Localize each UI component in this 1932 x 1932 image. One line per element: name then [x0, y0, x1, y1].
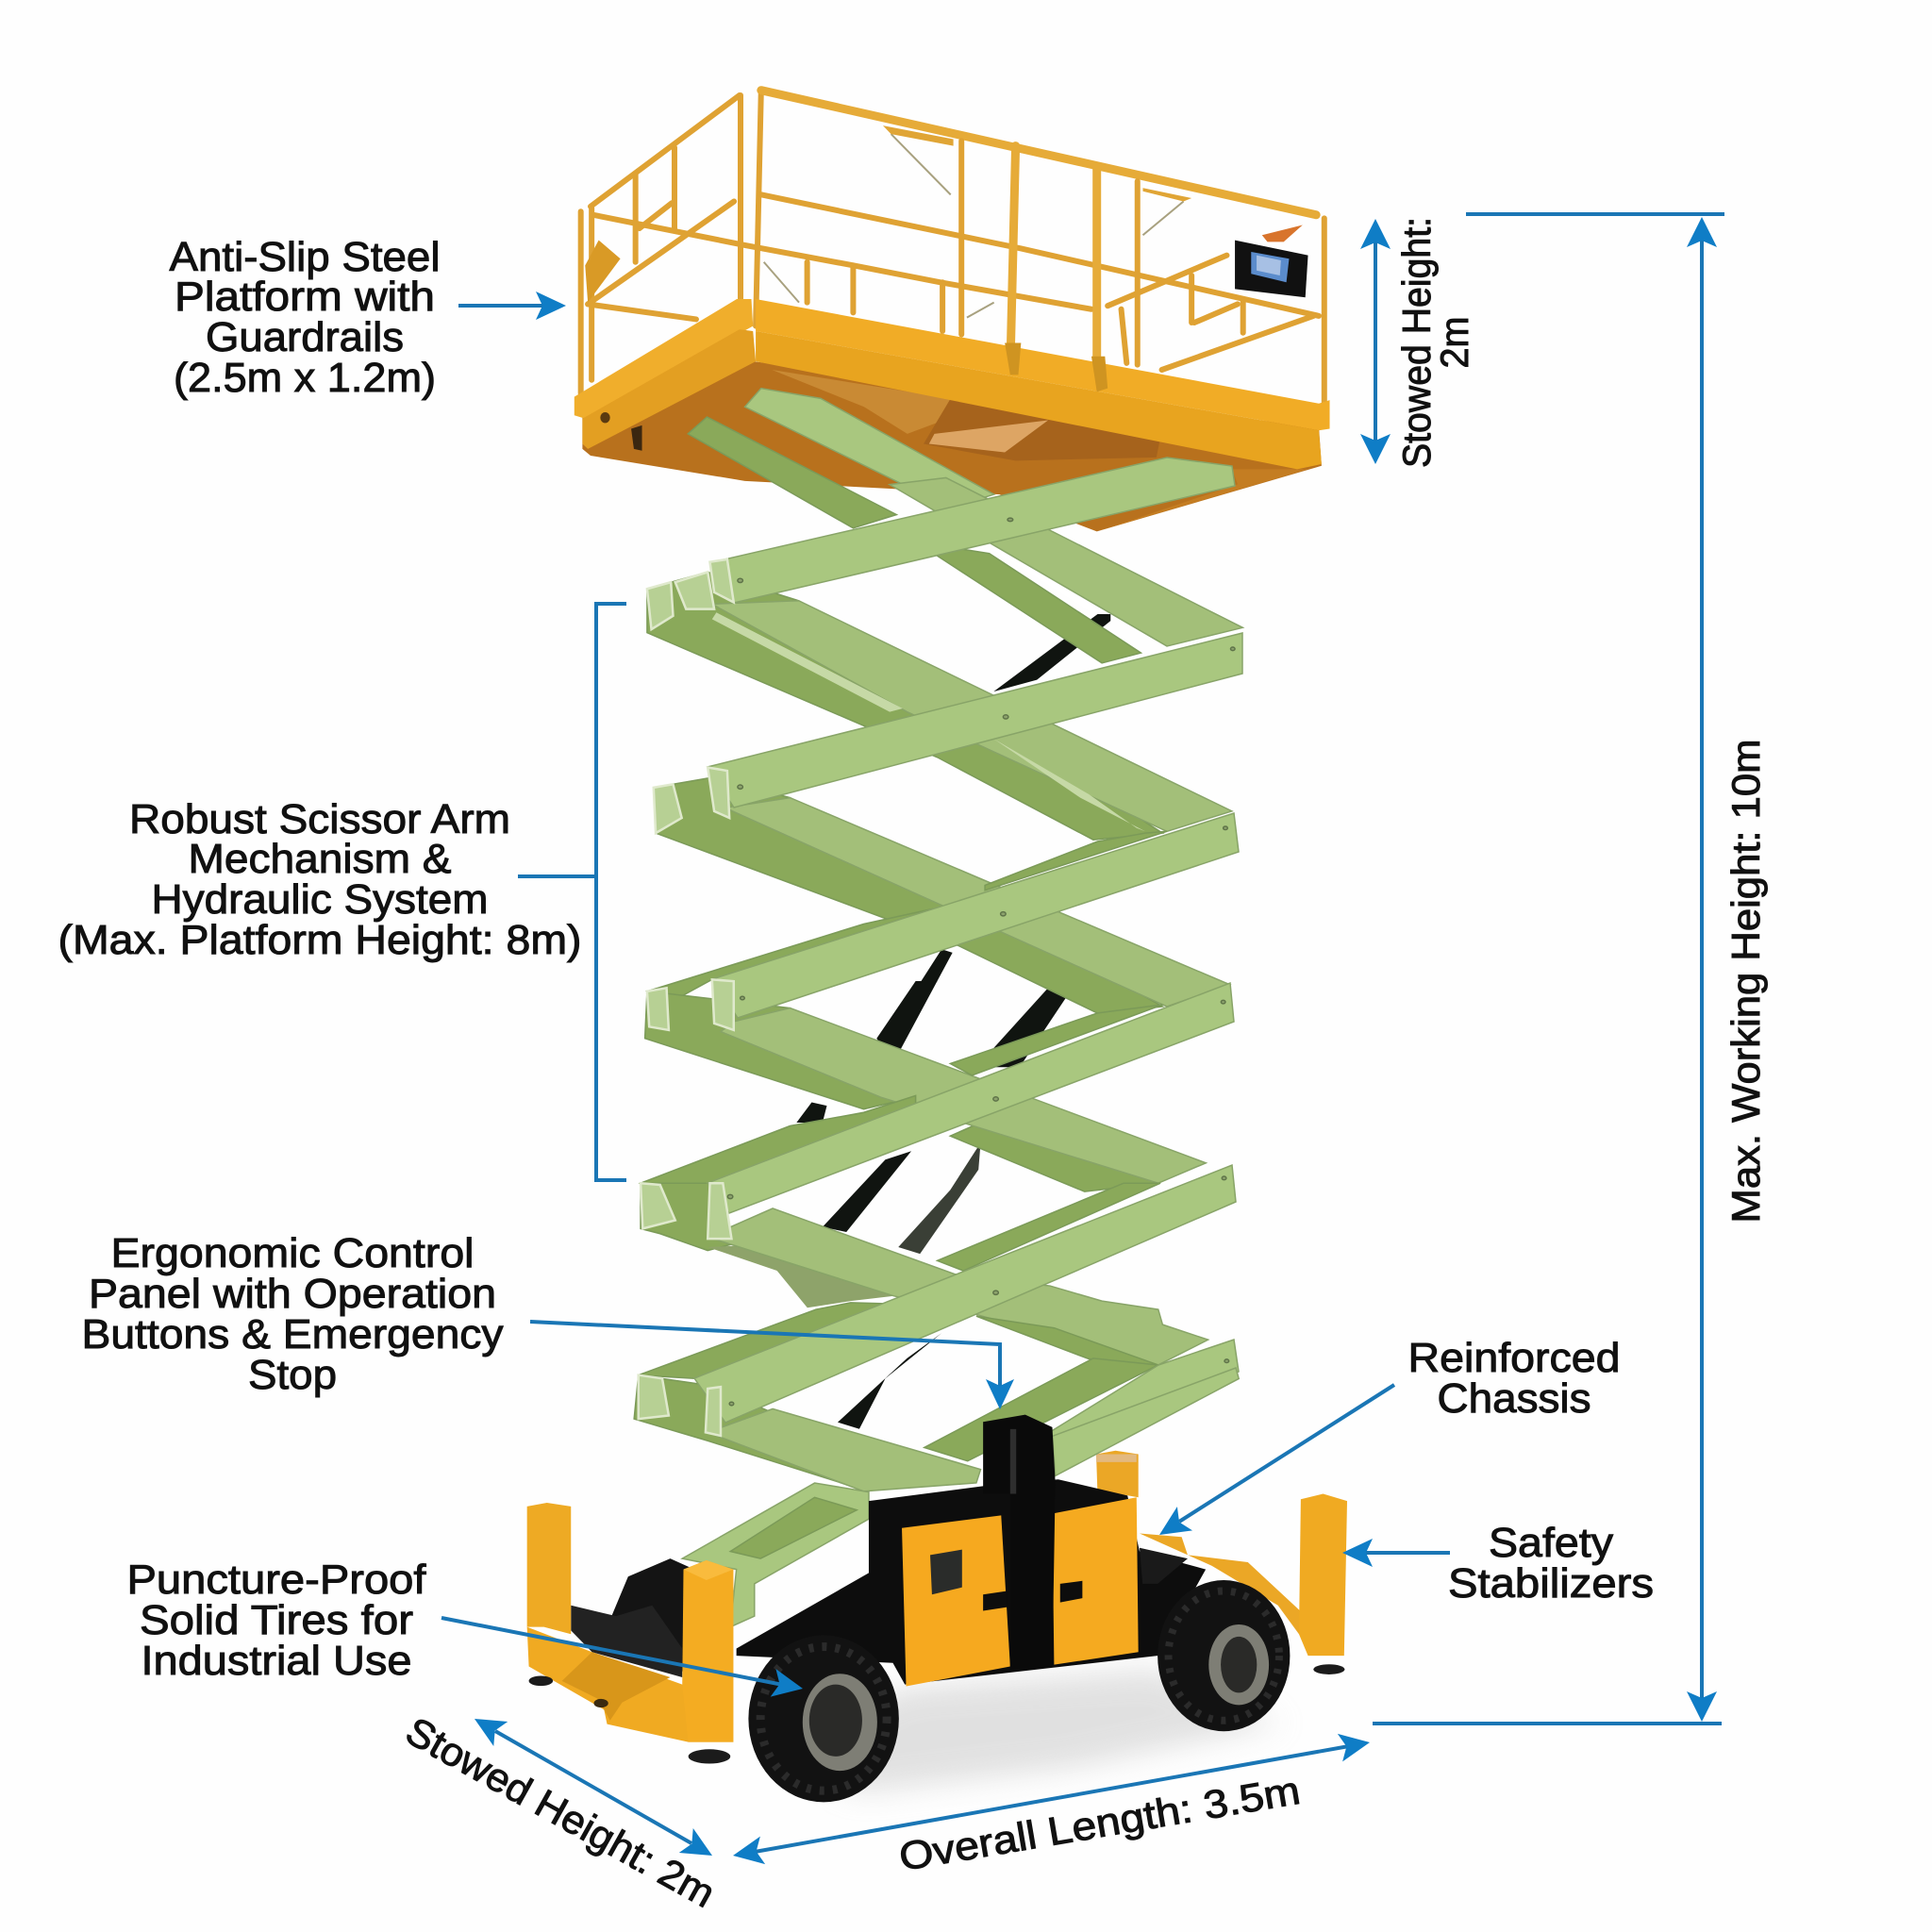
label: control panel: Ergonomic Control — [111, 1230, 474, 1276]
dimension arrow: stowed height upper — [1360, 219, 1391, 464]
scissor arm mechanism — [634, 389, 1242, 1491]
label: stabilizers: Stabilizers — [1448, 1560, 1654, 1607]
arrow: control panel callout — [530, 1322, 1014, 1409]
label: scissor arm mechanism — [58, 796, 581, 963]
platform with guardrails — [575, 91, 1330, 531]
rear stabilizer post — [1096, 1451, 1139, 1497]
label: chassis — [1407, 1335, 1621, 1422]
label: anti-slip platform: Guardrails — [206, 314, 404, 360]
label: stowed height upper — [1394, 217, 1476, 468]
label: anti-slip platform — [170, 234, 440, 401]
rear tire — [1158, 1580, 1290, 1731]
label: chassis: Reinforced — [1407, 1335, 1621, 1381]
label: anti-slip platform: (2.5m x 1.2m) — [174, 355, 436, 401]
back arms — [916, 541, 1141, 663]
front stabilizer — [527, 1560, 733, 1764]
label: scissor arm mechanism: (Max. Platform Height: 8m) — [58, 917, 581, 963]
lower back arms — [645, 991, 907, 1109]
label: stowed height upper: Stowed Height: — [1394, 217, 1439, 468]
scissor base arm — [682, 1368, 1239, 1627]
label: stabilizers — [1448, 1520, 1654, 1607]
guardrails — [581, 91, 1324, 424]
black control column — [983, 1415, 1056, 1670]
arrow: stabilizers callout — [1342, 1539, 1450, 1567]
rear left stabilizer and hidden wheel — [527, 1503, 694, 1677]
label: control panel: Panel with Operation — [89, 1271, 496, 1317]
platform underside — [582, 361, 1322, 531]
control box on railing — [1235, 225, 1308, 297]
label: anti-slip platform: Anti-Slip Steel — [170, 234, 440, 280]
label: tires: Puncture-Proof — [126, 1557, 426, 1603]
label: overall length: Overall Length: 3.5m — [896, 1768, 1303, 1879]
deck side faces — [575, 299, 1330, 469]
label: scissor arm mechanism: Hydraulic System — [151, 876, 489, 923]
arrow: platform callout — [458, 291, 566, 320]
chassis base — [527, 1368, 1347, 1802]
label: tires: Solid Tires for — [140, 1597, 413, 1643]
label: max working height: Max. Working Height: 10m — [1724, 740, 1768, 1223]
upper arms — [688, 389, 994, 528]
front tire — [748, 1635, 899, 1802]
label: control panel: Buttons & Emergency — [81, 1311, 504, 1357]
label: control panel — [81, 1230, 504, 1398]
label: anti-slip platform: Platform with — [175, 274, 435, 320]
ground shadow — [785, 1670, 1278, 1792]
hydraulic cylinders — [796, 614, 1110, 1429]
label: stabilizers: Safety — [1489, 1520, 1613, 1566]
dimension arrow: overall length — [730, 1728, 1373, 1870]
chassis body — [737, 1479, 1206, 1685]
dimension arrow: stowed height lower — [468, 1707, 719, 1868]
far stabilizer — [1140, 1493, 1347, 1674]
arm end caps and pivot pins — [639, 518, 1235, 1436]
front arms — [694, 458, 1242, 1466]
yellow panel doors — [902, 1497, 1139, 1687]
label: scissor arm mechanism: Mechanism & — [189, 836, 451, 882]
label: stowed height lower: Stowed Height: 2m — [399, 1708, 723, 1916]
bracket: scissor mechanism callout — [518, 604, 626, 1180]
arrow: tires callout — [441, 1618, 806, 1703]
label: stowed height upper: 2m — [1432, 317, 1476, 368]
arrow: chassis callout — [1152, 1385, 1394, 1547]
dimension arrow: max working height — [1373, 214, 1724, 1724]
label: tires: Industrial Use — [142, 1638, 411, 1684]
label: chassis: Chassis — [1438, 1375, 1591, 1422]
label: tires — [126, 1557, 426, 1684]
label: control panel: Stop — [248, 1352, 337, 1398]
label: scissor arm mechanism: Robust Scissor Arm — [129, 796, 510, 842]
